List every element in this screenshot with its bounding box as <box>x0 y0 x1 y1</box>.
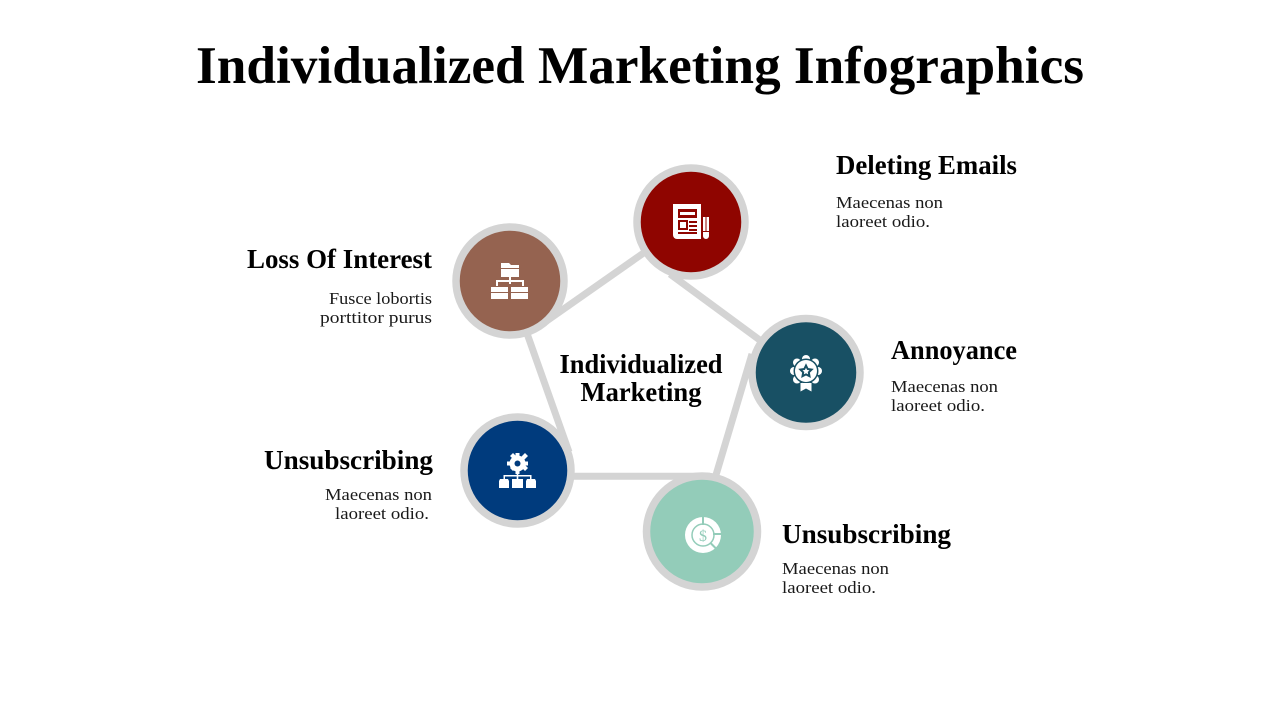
text: loss of interest: porttitor purus <box>320 308 432 327</box>
text: unsubscribing left <box>264 445 433 523</box>
text: unsubscribing left: Unsubscribing <box>264 445 433 475</box>
center label: Marketing <box>580 377 702 407</box>
icon: folder hierarchy <box>491 263 528 299</box>
icon: newspaper <box>673 204 709 239</box>
text: unsubscribing bottom: Maecenas non <box>782 559 890 578</box>
title: Individualized Marketing Infographics <box>196 37 1084 95</box>
text: annoyance: Maecenas non <box>891 377 999 396</box>
text: unsubscribing bottom: laoreet odio. <box>782 578 876 597</box>
text: annoyance <box>891 335 1017 415</box>
pentagon connector lines <box>524 242 770 485</box>
text: loss of interest: Loss Of Interest <box>247 244 432 274</box>
text: unsubscribing bottom <box>782 519 951 597</box>
icon: dollar donut chart: $ <box>699 528 707 545</box>
text: annoyance: laoreet odio. <box>891 396 985 415</box>
text: deleting emails <box>836 150 1017 231</box>
text: deleting emails: laoreet odio. <box>836 212 930 231</box>
text: unsubscribing left: Maecenas non <box>325 485 433 504</box>
center label: Individualized <box>560 349 722 379</box>
text: loss of interest <box>247 244 432 327</box>
node: annoyance <box>752 318 860 426</box>
icon: gear network <box>499 453 536 488</box>
node: unsubscribing blue <box>464 417 571 524</box>
text: deleting emails: Deleting Emails <box>836 150 1017 180</box>
text: unsubscribing left: laoreet odio. <box>335 504 429 523</box>
text: unsubscribing bottom: Unsubscribing <box>782 519 951 549</box>
node: unsubscribing green <box>646 476 758 587</box>
center label <box>560 349 722 407</box>
text: deleting emails: Maecenas non <box>836 193 944 212</box>
node: deleting emails <box>637 168 745 276</box>
node: loss of interest <box>456 227 564 335</box>
icon: award badge <box>790 355 822 392</box>
text: loss of interest: Fusce lobortis <box>329 289 432 308</box>
text: annoyance: Annoyance <box>891 335 1017 365</box>
